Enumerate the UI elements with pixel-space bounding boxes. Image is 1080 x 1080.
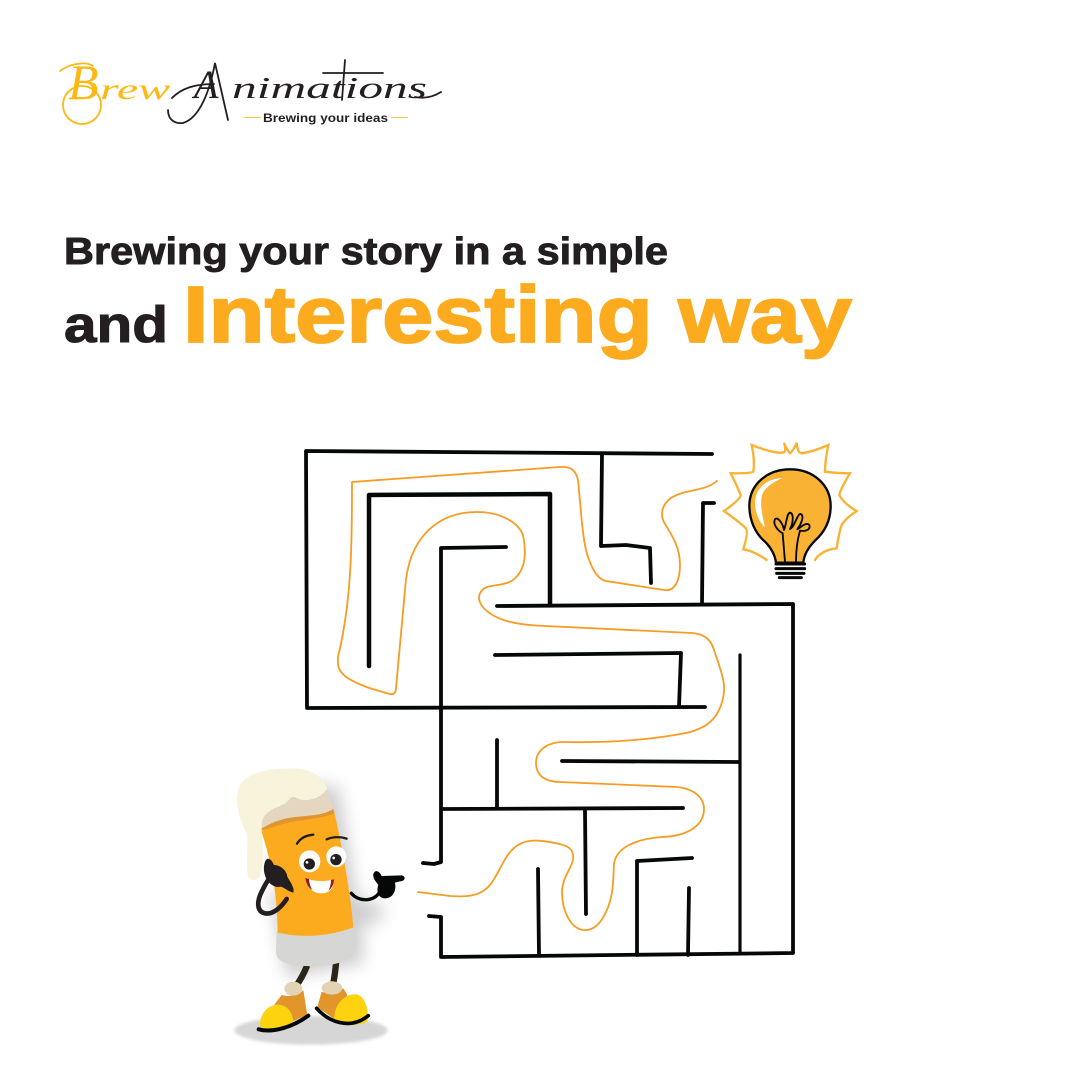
icon: light bulb bbox=[724, 443, 857, 578]
maze bbox=[306, 451, 793, 957]
right shoe bbox=[317, 981, 368, 1025]
foam beige band bbox=[259, 790, 334, 830]
bulb highlight bbox=[755, 478, 783, 527]
logo: Brew Animations bbox=[60, 54, 441, 125]
foam dark band bbox=[260, 805, 334, 829]
right arm and pointing hand bbox=[351, 871, 405, 900]
logo word: Animations bbox=[168, 60, 441, 123]
maze: orange solution path bbox=[338, 467, 724, 930]
eyebrows bbox=[297, 835, 347, 844]
logo word: Animations: nimations bbox=[232, 70, 427, 105]
logo word: Animations: A bbox=[191, 62, 219, 107]
heading: line two: and bbox=[64, 296, 168, 353]
bulb rays bbox=[724, 443, 857, 560]
logo tagline: Brewing your ideas bbox=[263, 113, 388, 125]
logo word: Brew bbox=[60, 54, 170, 124]
foam cream bbox=[237, 768, 327, 880]
body: orange bbox=[260, 808, 353, 936]
left shoe bbox=[259, 982, 308, 1030]
body shadow bbox=[260, 783, 387, 977]
left arm and phone hand bbox=[258, 859, 294, 914]
bulb base bbox=[776, 564, 805, 578]
legs bbox=[295, 963, 336, 988]
logo word: Brew: B bbox=[68, 54, 99, 110]
bulb filament bbox=[774, 513, 810, 562]
heading: line one: Brewing your story in a simple bbox=[64, 231, 668, 273]
bulb glass bbox=[749, 469, 831, 563]
ground shadow bbox=[234, 1016, 388, 1045]
logo word: Brew: rew bbox=[100, 73, 170, 106]
character: beer glass mascot bbox=[234, 768, 405, 1045]
mouth bbox=[305, 878, 334, 893]
eyes bbox=[299, 846, 346, 872]
maze: lower-right walls bbox=[429, 503, 793, 957]
body: grey base bbox=[276, 926, 353, 966]
maze: upper-left walls bbox=[306, 451, 712, 864]
heading: line two: Interesting way bbox=[183, 270, 853, 359]
